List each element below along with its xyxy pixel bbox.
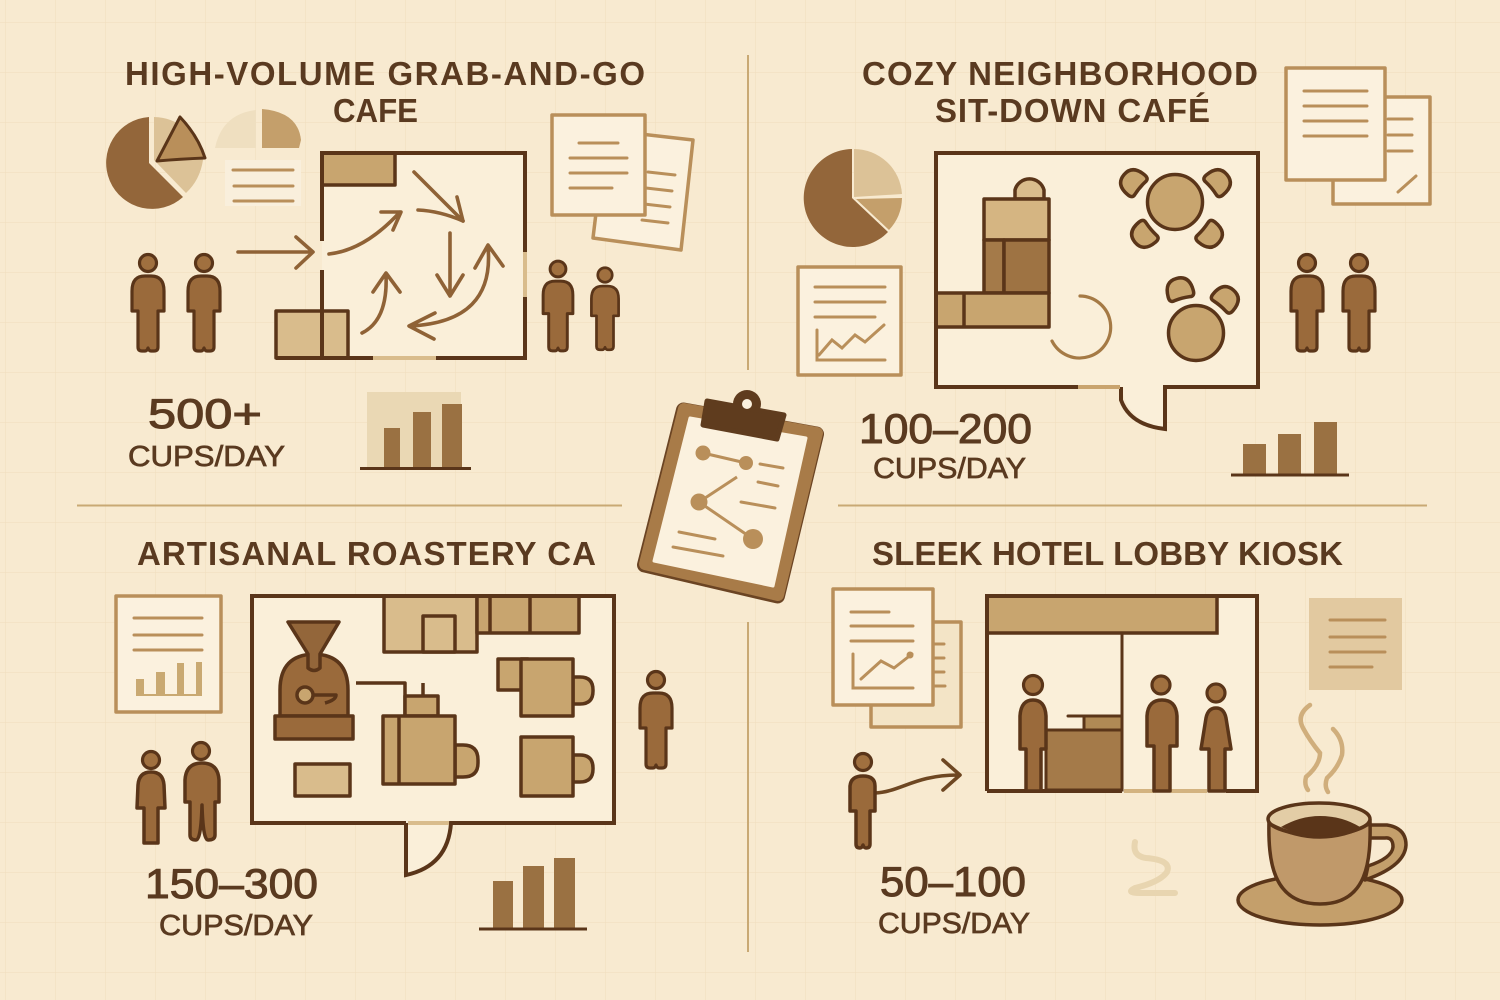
heading: high-volume grab-and-go cafe: CAFE <box>333 92 418 129</box>
floor plan with tables <box>936 153 1258 429</box>
curved seat <box>1052 296 1111 358</box>
faded half pie <box>215 109 301 148</box>
stat: 150-300 cups/day: 150–300 <box>145 860 318 907</box>
floor plan with customer flow arrows <box>238 153 525 358</box>
panel: cozy neighborhood sit-down cafe <box>798 55 1430 485</box>
heading: cozy neighborhood sit-down cafe: COZY NEIGHBORHOOD <box>862 55 1258 92</box>
service counter <box>276 311 348 358</box>
pie chart with triangle slice <box>106 117 205 209</box>
heading: artisanal roastery: ARTISANAL ROASTERY CA <box>137 535 596 572</box>
kiosk desk <box>1046 716 1122 790</box>
pie chart <box>804 149 902 247</box>
people waiting <box>132 254 220 351</box>
people at right <box>543 261 619 351</box>
stat: 100-200 cups/day: 100–200 <box>859 405 1032 452</box>
seating tables <box>295 659 593 796</box>
handle <box>1365 825 1406 880</box>
top counter <box>987 596 1217 633</box>
heading: high-volume grab-and-go cafe: HIGH-VOLUME GRAB-AND-GO <box>125 55 645 92</box>
kiosk floor plan <box>987 596 1257 791</box>
steam <box>1301 705 1342 792</box>
people <box>1291 254 1375 351</box>
bar chart <box>479 858 587 929</box>
stat: 100-200 cups/day <box>859 405 1032 485</box>
people <box>137 742 219 843</box>
faded note <box>225 160 301 206</box>
bar chart <box>1231 422 1349 475</box>
people in kiosk <box>1020 676 1231 791</box>
saucer <box>1238 875 1402 925</box>
heading: cozy neighborhood sit-down cafe: SIT-DOWN CAFÉ <box>935 92 1210 129</box>
bar chart <box>360 392 471 468</box>
roastery floor plan <box>252 596 614 875</box>
flow diagram on clipboard <box>673 446 783 556</box>
report with bars <box>116 596 221 712</box>
heading: sleek hotel lobby kiosk: SLEEK HOTEL LOBBY KIOSK <box>872 535 1343 572</box>
stat: 500+ cups/day: 500+ <box>148 390 262 437</box>
stat: 50-100 cups/day: 50–100 <box>880 858 1026 905</box>
stacked documents with chart <box>833 589 961 727</box>
espresso machine <box>356 683 478 784</box>
stacked documents <box>1286 68 1430 204</box>
flow arrows <box>238 172 503 339</box>
heading: cozy neighborhood sit-down cafe <box>862 55 1258 129</box>
back counters <box>384 596 579 652</box>
clipboard <box>644 390 817 596</box>
coffee <box>1281 816 1360 836</box>
stat: 150-300 cups/day <box>145 860 318 942</box>
stat: 50-100 cups/day <box>878 858 1030 940</box>
faint steam squiggle <box>1131 842 1175 893</box>
stat: 100-200 cups/day: CUPS/DAY <box>873 453 1026 485</box>
stacked documents <box>552 115 693 250</box>
rim <box>1268 803 1370 835</box>
panel: high-volume grab-and-go cafe <box>106 55 693 473</box>
report with line chart <box>798 267 901 375</box>
pickup counter <box>322 153 395 185</box>
person at right <box>640 672 672 768</box>
stat: 500+ cups/day <box>128 390 285 473</box>
roaster machine <box>275 622 353 739</box>
stat: 500+ cups/day: CUPS/DAY <box>128 441 285 473</box>
counter <box>936 179 1049 327</box>
stat: 50-100 cups/day: CUPS/DAY <box>878 908 1030 940</box>
person walking with arrow <box>850 754 960 848</box>
panel: sleek hotel lobby kiosk <box>833 535 1406 940</box>
body <box>1269 820 1370 904</box>
clip <box>703 390 784 439</box>
table with four chairs <box>1116 165 1235 252</box>
heading: high-volume grab-and-go cafe <box>125 55 645 129</box>
stat: 150-300 cups/day: CUPS/DAY <box>159 910 313 942</box>
tan note <box>1309 598 1402 690</box>
coffee cup on saucer <box>1238 803 1406 925</box>
panel: artisanal roastery cafe <box>116 535 672 942</box>
table with two chairs <box>1164 275 1243 360</box>
